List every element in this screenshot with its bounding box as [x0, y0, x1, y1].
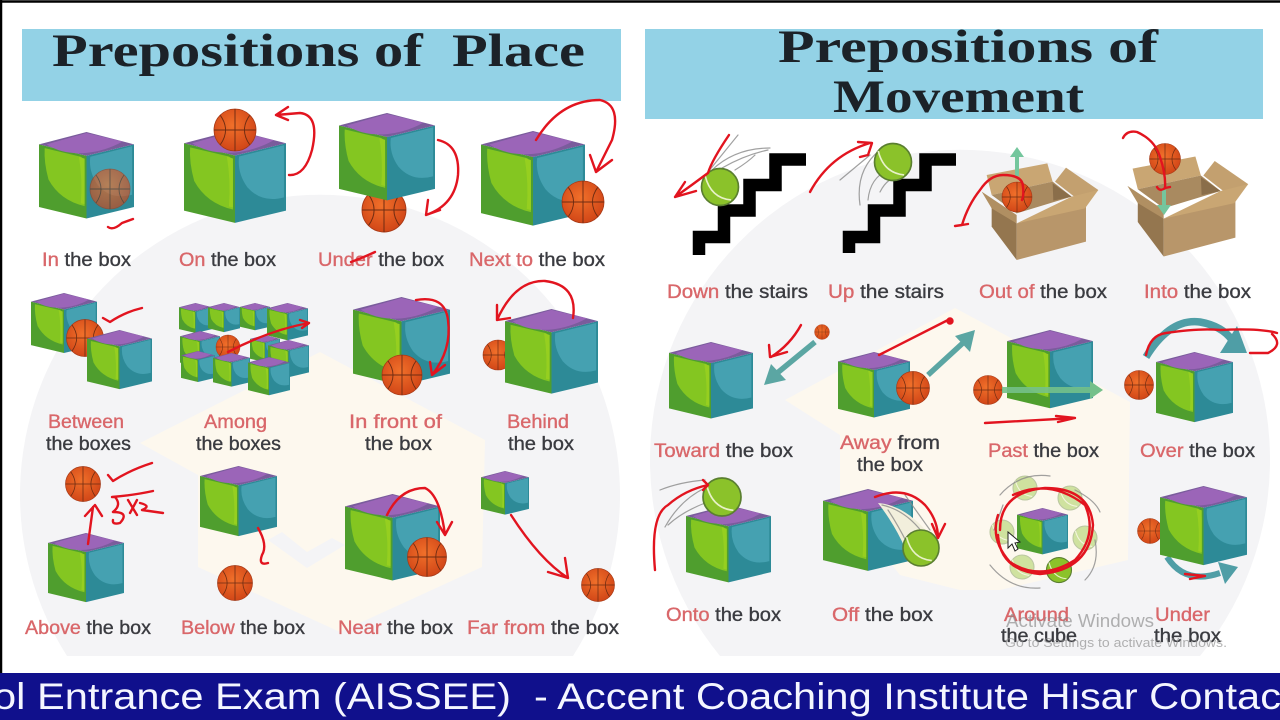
- item: in the box: [39, 132, 134, 271]
- item: far from the box: Far from the box: [467, 618, 620, 639]
- item: between the boxes: [31, 293, 152, 455]
- item: in front of the box: In front of: [349, 412, 443, 433]
- item: under the box: [318, 113, 445, 271]
- item: toward the box: Toward the box: [654, 441, 794, 462]
- item: down the stairs: Down the stairs: [667, 282, 808, 303]
- item: into the box: Into the box: [1144, 282, 1252, 303]
- background circle right: [650, 150, 1270, 656]
- title bar: place: Prepositions of Place: [52, 25, 585, 77]
- scrolling news ticker: ol Entrance Exam (AISSEE) - Accent Coaching Institute Hisar Contac: [0, 676, 1280, 717]
- background circle left: [20, 195, 620, 656]
- item: above the box: Above the box: [25, 618, 152, 639]
- item: into the box: [1127, 144, 1252, 303]
- item: toward the box: [654, 324, 830, 462]
- item: out of the box: Out of the box: [979, 282, 1108, 303]
- item: on the box: [179, 109, 286, 271]
- item: in front of the box: the box: [365, 434, 433, 455]
- item: around the cube: Around: [1004, 605, 1069, 626]
- item: under the box, movement: [1138, 486, 1247, 647]
- item: in the box: In the box: [42, 250, 132, 271]
- item: among the boxes: the boxes: [196, 434, 281, 455]
- item: near the box: Near the box: [338, 618, 454, 639]
- item: far from the box: [467, 471, 620, 639]
- handwritten red annotations: [85, 100, 1277, 579]
- item: behind the box: the box: [508, 434, 575, 455]
- item: behind the box: [483, 309, 598, 455]
- item: down the stairs: [667, 135, 808, 303]
- item: away from the box: the box: [857, 455, 924, 476]
- item: away from the box: Away from: [840, 433, 940, 454]
- item: below the box: [181, 466, 306, 639]
- item: near the box: [338, 494, 454, 639]
- item: away from the box: [838, 330, 975, 476]
- item: over the box: [1124, 322, 1256, 462]
- item: onto the box: [660, 478, 782, 626]
- item: off the box: Off the box: [832, 605, 934, 626]
- item: onto the box: Onto the box: [666, 605, 782, 626]
- item: up the stairs: [828, 144, 956, 303]
- activate windows watermark: Activate Windows: [1006, 611, 1154, 631]
- activate windows watermark: Go to Settings to activate Windows.: [1005, 635, 1227, 650]
- title bar: place: [22, 25, 621, 101]
- mouse cursor: [1008, 532, 1020, 551]
- activate windows watermark: [1005, 611, 1227, 650]
- item: in front of the box: [349, 297, 450, 455]
- item: behind the box: Behind: [507, 412, 569, 433]
- cream arrow shape right: [785, 308, 1130, 590]
- item: off the box: [823, 489, 939, 626]
- item: past the box: Past the box: [988, 441, 1100, 462]
- item: between the boxes: Between: [48, 412, 124, 433]
- item: below the box: Below the box: [181, 618, 306, 639]
- title bar: movement: [645, 21, 1263, 123]
- item: next to the box: Next to the box: [469, 250, 606, 271]
- item: under the box, movement: Under: [1155, 605, 1211, 626]
- panel: prepositions of movement: [645, 21, 1270, 656]
- item: up the stairs: Up the stairs: [828, 282, 944, 303]
- item: on the box: On the box: [179, 250, 277, 271]
- item: between the boxes: the boxes: [46, 434, 131, 455]
- title bar: movement: Movement: [833, 71, 1084, 123]
- item: above the box: [25, 466, 152, 639]
- item: past the box: [974, 330, 1103, 462]
- title bar: movement: Prepositions of: [778, 21, 1160, 73]
- item: around the cube: [990, 475, 1100, 647]
- item: next to the box: [469, 131, 606, 271]
- item: under the box, movement: the box: [1154, 626, 1222, 647]
- item: over the box: Over the box: [1140, 441, 1256, 462]
- item: under the box: Under the box: [318, 250, 445, 271]
- item: among the boxes: [179, 303, 309, 455]
- item: around the cube: the cube: [1001, 626, 1077, 647]
- panel: prepositions of place: [20, 25, 621, 656]
- item: out of the box: [979, 147, 1108, 303]
- item: among the boxes: Among: [204, 412, 267, 433]
- cream arrow shape left: [140, 352, 485, 632]
